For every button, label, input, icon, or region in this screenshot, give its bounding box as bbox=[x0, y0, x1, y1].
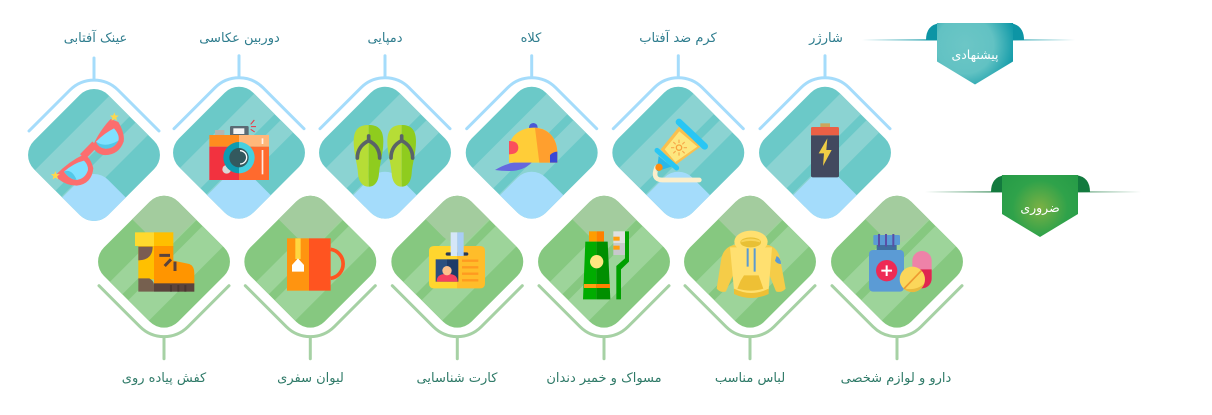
label: sunglasses: عینک آفتابی bbox=[64, 29, 127, 46]
label: medicine and personal items: دارو و لوازم شخصی bbox=[841, 371, 952, 386]
diamond: charger bbox=[739, 67, 906, 312]
diamond: hiking boots bbox=[83, 102, 250, 347]
label: camera: دوربین عکاسی bbox=[199, 31, 280, 46]
icon: ID badge bbox=[429, 232, 485, 288]
hoop: sunscreen bbox=[613, 56, 743, 129]
label: suitable clothing: لباس مناسب bbox=[715, 371, 785, 386]
hoop: flip-flops bbox=[320, 56, 450, 129]
diamond: sunscreen bbox=[593, 67, 759, 312]
panel: hat bbox=[446, 31, 612, 312]
icon: sunscreen tube bbox=[655, 122, 705, 180]
panel: medicine and personal items bbox=[816, 102, 983, 386]
label: toothbrush and toothpaste: مسواک و خمیر دندان bbox=[546, 371, 662, 386]
label: hiking boots: کفش پیاده روی bbox=[122, 371, 207, 386]
icon: toothpaste and brush bbox=[583, 231, 629, 299]
panel: suitable clothing bbox=[669, 102, 836, 386]
diamond: flip-flops bbox=[299, 67, 466, 312]
diamond: camera bbox=[153, 67, 320, 312]
ribbon: essential bbox=[925, 175, 1141, 237]
diamond: sunglasses bbox=[8, 69, 175, 314]
label: charger: شارژر bbox=[808, 31, 843, 46]
diamond: travel mug bbox=[230, 102, 396, 347]
icon: camera bbox=[209, 120, 269, 180]
panel: sunscreen bbox=[593, 29, 759, 312]
hoop: medicine and personal items bbox=[832, 286, 962, 359]
panel: sunglasses bbox=[8, 29, 175, 314]
diamond: medicine and personal items bbox=[816, 102, 983, 347]
icon: medicine bottle and pills bbox=[869, 234, 932, 292]
hoop: hat bbox=[467, 56, 597, 129]
diamond: suitable clothing bbox=[669, 102, 836, 347]
diamond: toothbrush and toothpaste bbox=[523, 102, 690, 347]
icon: flip-flops bbox=[354, 125, 416, 187]
hoop: travel mug bbox=[245, 286, 375, 359]
ribbon: suggested: پیشنهادی bbox=[951, 47, 999, 63]
panel: travel mug bbox=[230, 102, 396, 386]
label: travel mug: لیوان سفری bbox=[277, 371, 344, 386]
panel: ID card bbox=[377, 102, 543, 386]
hoop: ID card bbox=[392, 286, 522, 359]
hoop: sunglasses bbox=[29, 58, 159, 131]
label: ID card: کارت شناسایی bbox=[417, 371, 498, 386]
panel: toothbrush and toothpaste bbox=[523, 102, 690, 386]
label: flip-flops: دمپایی bbox=[367, 31, 403, 46]
diamond: ID card bbox=[377, 102, 543, 347]
label: hat: کلاه bbox=[521, 31, 542, 46]
hoop: charger bbox=[760, 56, 890, 129]
diamond: hat bbox=[446, 67, 612, 312]
hoop: hiking boots bbox=[99, 286, 229, 359]
icon: mug bbox=[287, 238, 343, 291]
panel: flip-flops bbox=[299, 31, 466, 312]
icon: boot bbox=[135, 232, 194, 292]
hoop: suitable clothing bbox=[685, 286, 815, 359]
panel: camera bbox=[153, 31, 320, 312]
hoop: camera bbox=[174, 56, 304, 129]
icon: cap bbox=[495, 123, 557, 171]
icon: hoodie bbox=[717, 231, 786, 298]
icon: sunglasses bbox=[51, 112, 124, 186]
panel: hiking boots bbox=[83, 102, 250, 386]
panel: charger bbox=[739, 31, 906, 312]
ribbon: essential: ضروری bbox=[1020, 200, 1060, 216]
label: sunscreen: کرم ضد آفتاب bbox=[639, 29, 718, 46]
ribbon: suggested bbox=[862, 23, 1075, 84]
icon: battery bbox=[811, 123, 839, 177]
hoop: toothbrush and toothpaste bbox=[539, 286, 669, 359]
